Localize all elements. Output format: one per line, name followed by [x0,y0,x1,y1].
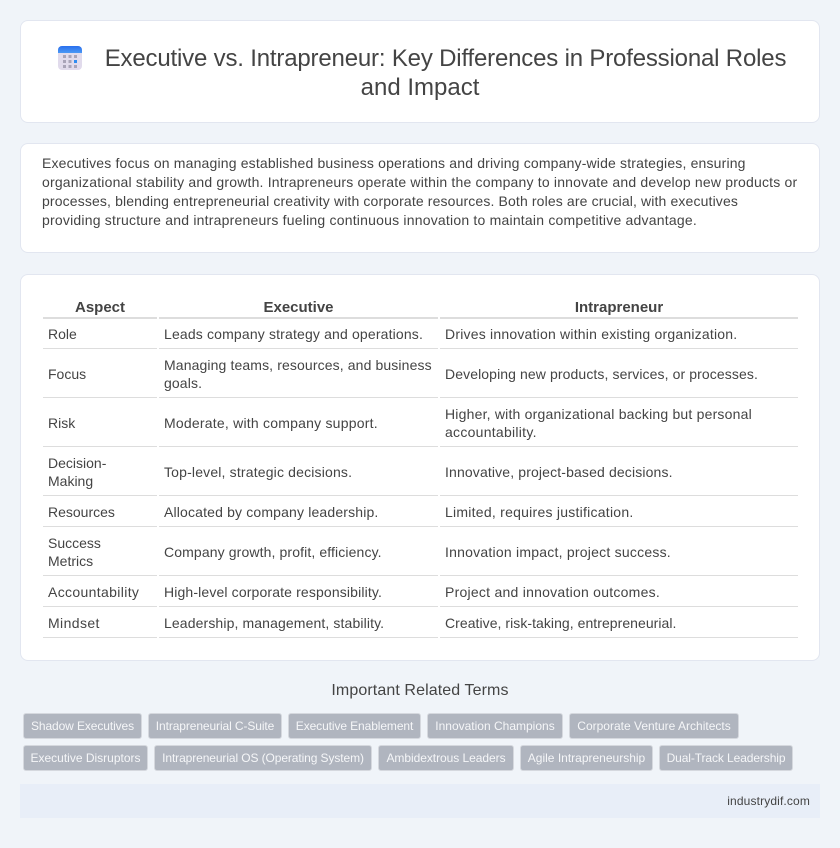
tag [569,713,739,739]
row: Success Metrics [48,535,671,569]
row: Risk: Moderate, with company support. [164,415,378,431]
text block: introduction: organizational stability and growth. Intrapreneurs operate within the company to innovate and develop new products or [42,174,797,190]
text block: introduction: processes, blending entrepreneurial creativity with corporate resources. Both roles are crucial, with executives [42,193,738,209]
row: Success Metrics: Metrics [48,553,93,569]
row: Resources: Resources [48,504,115,520]
tag [520,745,653,771]
tag [148,713,282,739]
row: Role: Leads company strategy and operations. [164,326,423,342]
panel: comparison table [20,274,820,661]
row: Decision-Making: Decision- [48,455,106,471]
row: Resources: Limited, requires justification. [445,504,634,520]
row: Focus: Managing teams, resources, and business [164,357,432,373]
tag: Corporate Venture Architects [577,719,731,733]
row: Risk [48,406,752,440]
text block: introduction: providing structure and intrapreneurs fueling continuous innovation to maintain competitive advantage. [42,212,697,228]
tag [154,745,372,771]
tag: Dual-Track Leadership [667,751,785,765]
row: Mindset [48,615,676,631]
footer credit: industrydif.com [727,794,810,808]
row: Mindset: Leadership, management, stability. [164,615,384,631]
tag [427,713,563,739]
tag: Intrapreneurial C-Suite [156,719,274,733]
row: Mindset: Creative, risk-taking, entrepreneurial. [445,615,676,631]
row: Mindset: Mindset [48,615,100,631]
text block: introduction [42,155,797,228]
row: Decision-Making: Top-level, strategic decisions. [164,464,352,480]
panel: title card [20,20,820,123]
row: Role: Role [48,326,77,342]
tag: Agile Intrapreneurship [528,751,645,765]
text block: introduction: Executives focus on managing established business operations and driving company-wide strategies, ensuring [42,155,746,171]
row: Success Metrics: Innovation impact, project success. [445,544,671,560]
row: Role: Drives innovation within existing organization. [445,326,737,342]
row: Decision-Making: Innovative, project-based decisions. [445,464,673,480]
table header [75,299,663,316]
tags: related terms [23,713,793,771]
row: Focus: goals. [164,375,202,391]
row: Risk: accountability. [445,424,537,440]
row: Risk: Risk [48,415,75,431]
row: Focus [48,357,758,391]
heading: related terms: Important Related Terms [331,682,509,699]
row: Accountability [48,584,660,600]
tag: Innovation Champions [435,719,555,733]
row: Accountability: High-level corporate responsibility. [164,584,382,600]
icon: calendar [58,46,82,70]
table header: Intrapreneur [575,299,663,316]
tag [23,713,142,739]
tag: Executive Disruptors [30,751,141,765]
row: Resources [48,504,634,520]
table header: Executive [263,299,334,316]
tag: Intrapreneurial OS (Operating System) [162,751,364,765]
row: Role [48,326,737,342]
tag: Executive Enablement [296,719,413,733]
tag [288,713,421,739]
tag [23,745,148,771]
row: Focus: Focus [48,366,86,382]
row: Risk: Higher, with organizational backing but personal [445,406,752,422]
panel: introduction card [20,143,820,253]
row: Accountability: Accountability [48,584,139,600]
row: Accountability: Project and innovation outcomes. [445,584,660,600]
footer [20,784,820,818]
row: Success Metrics: Company growth, profit, efficiency. [164,544,382,560]
title: and Impact [361,74,479,101]
tag: Shadow Executives [31,719,134,733]
tag [659,745,793,771]
tag: Ambidextrous Leaders [386,751,506,765]
row: Decision-Making [48,455,673,489]
title [105,45,786,101]
table header: Aspect [75,299,125,316]
row: Success Metrics: Success [48,535,101,551]
title: Executive vs. Intrapreneur: Key Differences in Professional Roles [105,45,786,72]
row: Decision-Making: Making [48,473,93,489]
tag [378,745,514,771]
row: Focus: Developing new products, services, or processes. [445,366,758,382]
row: Resources: Allocated by company leadership. [164,504,378,520]
